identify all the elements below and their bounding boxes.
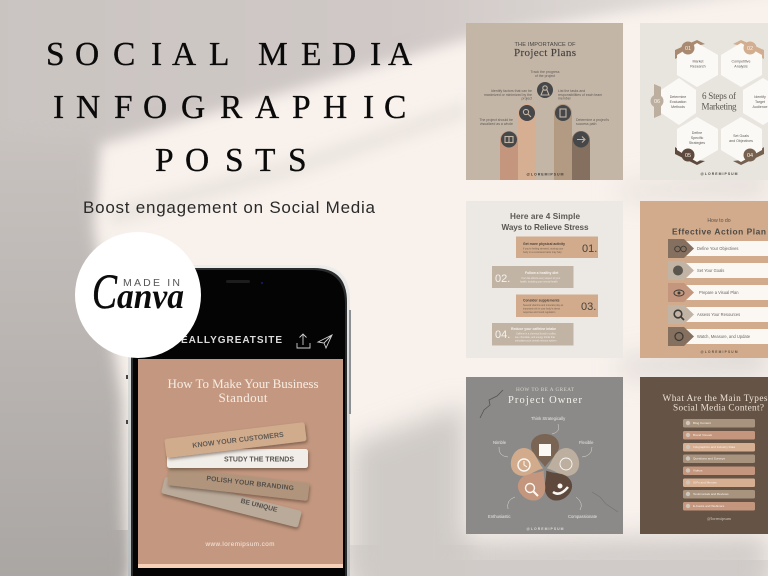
card 01 — [516, 236, 598, 258]
card 01: Get more physical activity — [523, 242, 565, 246]
content list: Infographics and Industry Data — [693, 445, 735, 449]
captions: List the tasks and — [558, 89, 585, 93]
row 4: Assess Your Resources — [697, 312, 740, 317]
title: POSTS — [155, 142, 307, 179]
heading: How to do — [707, 218, 731, 224]
handle: @LOREMIPSUM — [700, 350, 738, 354]
panel: 6 steps of marketing — [640, 23, 768, 180]
badge: made in canva: C — [92, 263, 117, 319]
center heading: Marketing — [702, 102, 737, 112]
title: INFOGRAPHIC — [53, 89, 406, 126]
title: SOCIAL MEDIA — [46, 36, 412, 73]
captions — [479, 70, 609, 126]
strip: be unique: BE UNIQUE — [240, 498, 278, 514]
card 04: 04. — [495, 329, 510, 341]
step labels — [670, 60, 768, 145]
center heading: 6 Steps of — [702, 91, 736, 101]
badge: made in canva: MADE IN — [123, 277, 180, 289]
step numbers: 04 — [747, 153, 753, 159]
panel: project plans — [466, 23, 623, 180]
card 03: response and mood regulation — [523, 311, 556, 314]
step labels: Specific — [691, 136, 703, 140]
row 4 — [668, 305, 768, 324]
captions: project — [521, 97, 532, 101]
phone header handle: EALLYGREATSITE — [181, 335, 282, 346]
strip: polish your branding: POLISH YOUR BRANDING — [206, 475, 294, 492]
card 04: stimulates your central nervous system — [515, 340, 556, 342]
heading: What Are the Main Types — [662, 394, 768, 404]
labels: Compassionate — [568, 514, 598, 519]
step numbers: 02 — [747, 46, 753, 52]
card 02: Follow a healthy diet — [525, 271, 559, 275]
labels: Think Strategically — [531, 416, 566, 421]
captions: Identify factors that can be — [491, 89, 532, 93]
labels: Flexible — [579, 440, 594, 445]
heading — [502, 212, 589, 232]
step numbers: 06 — [654, 99, 660, 105]
post url: www.loremipsum.com — [204, 541, 274, 548]
petal icons — [518, 444, 572, 496]
labels: Nimble — [493, 440, 507, 445]
step labels: Methods — [671, 105, 685, 109]
panel: project plans: Project Plans — [514, 47, 576, 59]
strip: know your customers: KNOW YOUR CUSTOMERS — [192, 432, 285, 450]
labels — [488, 416, 598, 519]
card 01: 01. — [582, 243, 597, 255]
content list — [683, 419, 755, 510]
card 04 — [492, 323, 574, 346]
post heading: How To Make Your Business — [168, 376, 318, 391]
post heading — [168, 376, 318, 405]
captions: success path — [576, 122, 596, 126]
captions: of the project — [535, 74, 555, 78]
card 02: Your diet affects every aspect of your — [521, 277, 560, 280]
row 2 — [668, 261, 768, 280]
row 1: Define Your Objectives — [697, 246, 738, 251]
step labels: Competitive — [732, 60, 750, 64]
captions: maximized or minimized by the — [484, 93, 532, 97]
step numbers — [650, 42, 756, 162]
panel: effective action plan: Effective Action Plan — [672, 226, 766, 236]
captions: The project should be — [479, 118, 513, 122]
card 02: 02. — [495, 273, 510, 285]
step labels: Research — [690, 64, 706, 68]
step labels: Strategies — [689, 141, 705, 145]
badge: made in canva: anva — [117, 276, 184, 316]
subtitle: Boost engagement on Social Media — [83, 198, 376, 217]
card 02: health, including your mental health — [520, 280, 558, 284]
step labels: Audience — [752, 105, 768, 109]
heading — [662, 394, 768, 410]
step labels: Define — [692, 131, 702, 135]
handle: @LOREMIPSUM — [526, 527, 564, 531]
icons — [501, 82, 589, 148]
row 3 — [668, 283, 768, 302]
heading: HOW TO BE A GREAT — [516, 387, 575, 393]
panel: relieve stress — [466, 201, 623, 358]
card 03: Several vitamins and minerals play an — [523, 304, 564, 307]
petals — [507, 434, 583, 506]
pillars — [500, 131, 518, 180]
step numbers: 01 — [685, 46, 691, 52]
content list: Blog Content — [693, 421, 711, 425]
heading: Social Media Content? — [673, 404, 764, 414]
step labels: Determine — [670, 95, 686, 99]
card 01: If you're feeling stressed, moving your — [523, 248, 563, 250]
phone mockup — [126, 265, 351, 576]
content list: Questions and Surveys — [693, 457, 725, 461]
handle: @loremipsum — [707, 516, 732, 521]
step tabs — [675, 40, 705, 59]
step labels: Set Goals — [733, 134, 749, 138]
content list: Brand Visuals — [693, 433, 712, 437]
icon: share — [297, 334, 310, 348]
row 5: Watch, Measure, and Update — [697, 334, 751, 339]
strip: be unique — [161, 477, 302, 528]
center heading — [702, 91, 737, 112]
panel: project owner — [466, 377, 623, 534]
icon: send — [318, 335, 332, 348]
heading: Here are 4 Simple — [510, 212, 580, 221]
handle: @LOREMIPSUM — [700, 172, 738, 176]
strip: study the trends: STUDY THE TRENDS — [224, 456, 294, 464]
row 3: Prepare a Visual Plan — [699, 290, 739, 295]
step numbers: 05 — [685, 153, 691, 159]
step labels: Market — [693, 60, 703, 64]
row 5 — [668, 327, 768, 346]
step labels: Target — [755, 100, 765, 104]
panel: project owner: Project Owner — [508, 395, 582, 406]
captions: member — [558, 97, 572, 101]
card 03: important role in your body's stress — [523, 308, 561, 310]
captions: Determine a project's — [576, 118, 609, 122]
content list: GIFs and Memes — [693, 481, 717, 485]
row 2: Set Your Goals — [697, 268, 724, 273]
card 02 — [492, 266, 574, 288]
phone screen post — [138, 359, 343, 568]
badge: made in canva — [75, 232, 201, 358]
hexagons — [661, 43, 768, 162]
card 01: body on a consistent basis may help — [523, 251, 562, 254]
step labels: Identify — [754, 95, 766, 99]
step labels: Evaluation — [670, 100, 686, 104]
panel: social media content types — [640, 377, 768, 534]
step labels: and Objectives — [729, 139, 753, 143]
heading: Ways to Relieve Stress — [502, 223, 589, 232]
heading: THE IMPORTANCE OF — [514, 42, 576, 48]
content list: E-books and Webinars — [693, 504, 725, 508]
card 04: Caffeine is a chemical found in coffee, — [516, 332, 557, 336]
connector lines — [499, 424, 592, 510]
title — [46, 36, 412, 179]
captions: Track the progress — [530, 70, 560, 74]
card 04: tea, chocolate, and energy drinks that — [515, 336, 555, 339]
card 04: Reduce your caffeine intake — [511, 327, 556, 331]
labels: Enthusiastic — [488, 514, 511, 519]
post heading: Standout — [218, 390, 268, 405]
content list: Videos — [693, 469, 703, 473]
panel: effective action plan — [640, 201, 768, 358]
card 03: Consider supplements — [523, 298, 560, 302]
captions: visualized as a whole — [480, 122, 513, 126]
card 03 — [516, 294, 598, 317]
content list: Testimonials and Reviews — [693, 492, 729, 496]
step labels: Analysis — [734, 64, 748, 68]
card 03: 03. — [581, 301, 596, 313]
strip: know your customers — [164, 422, 307, 458]
handle: @LOREMIPSUM — [526, 172, 564, 176]
strip: study the trends — [167, 449, 308, 468]
strip: polish your branding — [167, 467, 310, 501]
captions: responsibilities of each team — [558, 93, 602, 97]
row 1 — [668, 239, 768, 258]
